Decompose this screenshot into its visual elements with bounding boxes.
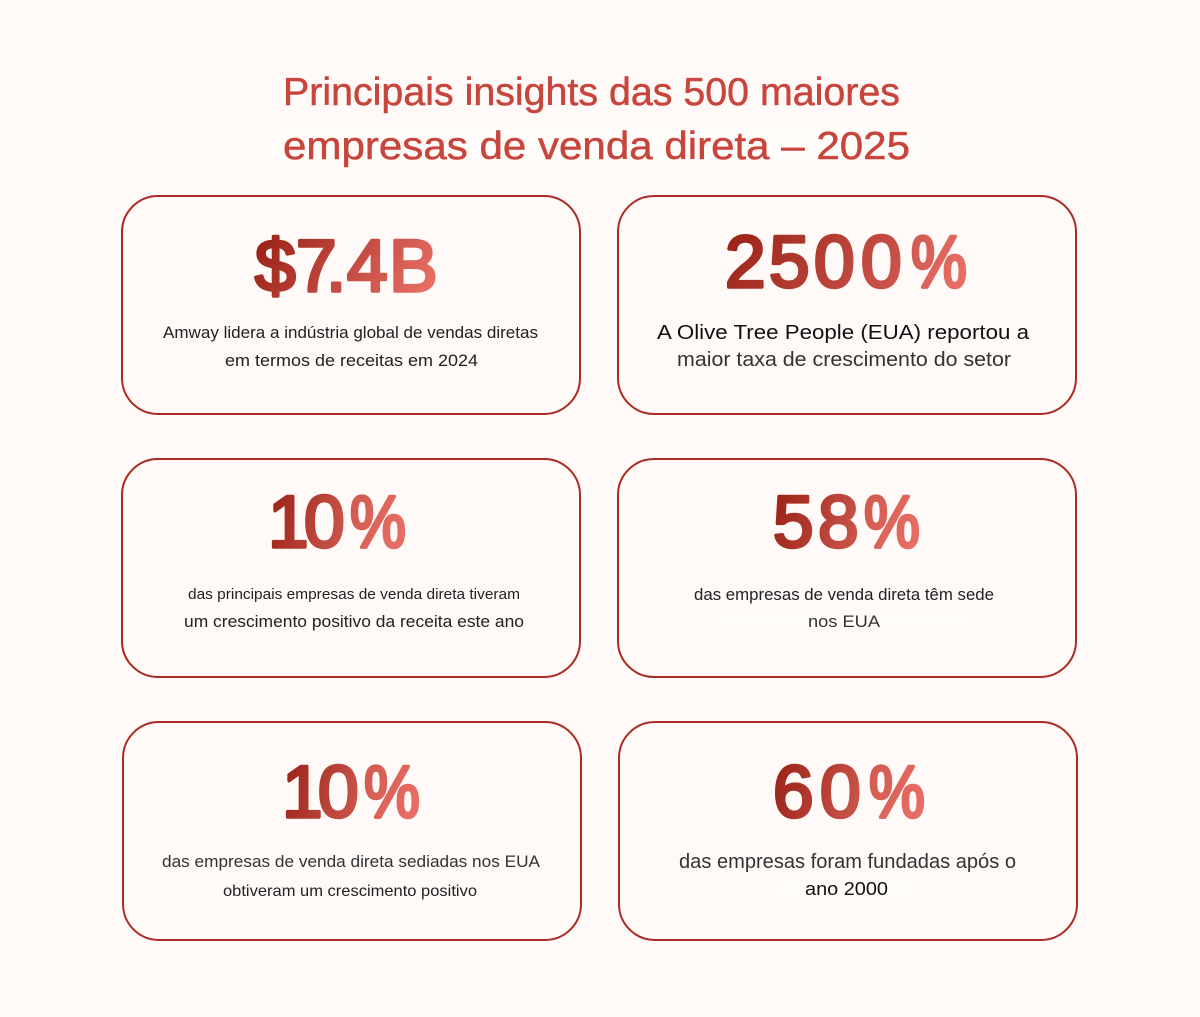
description: Amway: em termos de receitas em 2024: [225, 352, 478, 370]
description: US growth: [162, 852, 541, 900]
description: founded: ano 2000: [805, 879, 888, 899]
stat: 2500%: 2500: [725, 222, 902, 303]
description: US growth: obtiveram um crescimento positivo: [223, 883, 477, 900]
panel: positive revenue growth: [122, 459, 580, 677]
stat: 58%: 58: [773, 482, 859, 563]
description: headquarters: das empresas de venda direta têm sede: [694, 585, 994, 604]
description: Olive Tree People: [657, 321, 1030, 371]
description: headquarters: nos EUA: [808, 612, 881, 631]
description: Olive Tree People: maior taxa de crescimento do setor: [677, 348, 1011, 371]
description: US growth: das empresas de venda direta sediadas nos EUA: [162, 852, 541, 871]
panel: Amway revenue: [122, 196, 580, 414]
description: founded: [679, 851, 1016, 899]
description: Olive Tree People: A Olive Tree People (EUA) reportou a: [657, 321, 1030, 344]
stat: $7.4B: $7.4B: [255, 226, 438, 307]
description: headquarters: [694, 585, 994, 631]
title: empresas de venda direta – 2025: [283, 125, 910, 168]
panel: headquarters: [618, 459, 1076, 677]
stat: 10%: 10: [282, 752, 359, 833]
panel: US companies growth: [123, 722, 581, 940]
stat: 10%: [268, 482, 406, 563]
title: Principais insights das 500 maiores: [283, 71, 900, 114]
description: Amway: [163, 324, 538, 370]
description: revenue growth: [184, 586, 524, 631]
stat: 10%: 10: [268, 482, 345, 563]
stat: 60%: 60: [773, 752, 861, 833]
stat: 10%: %: [350, 482, 406, 563]
stat: 10%: %: [364, 752, 420, 833]
description: revenue growth: um crescimento positivo da receita este ano: [184, 612, 524, 631]
panel: Olive Tree People growth: [618, 196, 1076, 414]
panel: founded after 2000: [619, 722, 1077, 940]
description: Amway: Amway lidera a indústria global de vendas diretas: [163, 324, 538, 342]
stat: 58%: [773, 482, 920, 563]
stat: 10%: [282, 752, 420, 833]
description: revenue growth: das principais empresas de venda direta tiveram: [188, 586, 520, 603]
stat: 58%: %: [864, 482, 920, 563]
stat: 2500%: %: [911, 222, 967, 303]
stat: 60%: %: [869, 752, 925, 833]
stat: 60%: [773, 752, 925, 833]
title: [283, 71, 910, 168]
description: founded: das empresas foram fundadas após o: [679, 851, 1016, 873]
